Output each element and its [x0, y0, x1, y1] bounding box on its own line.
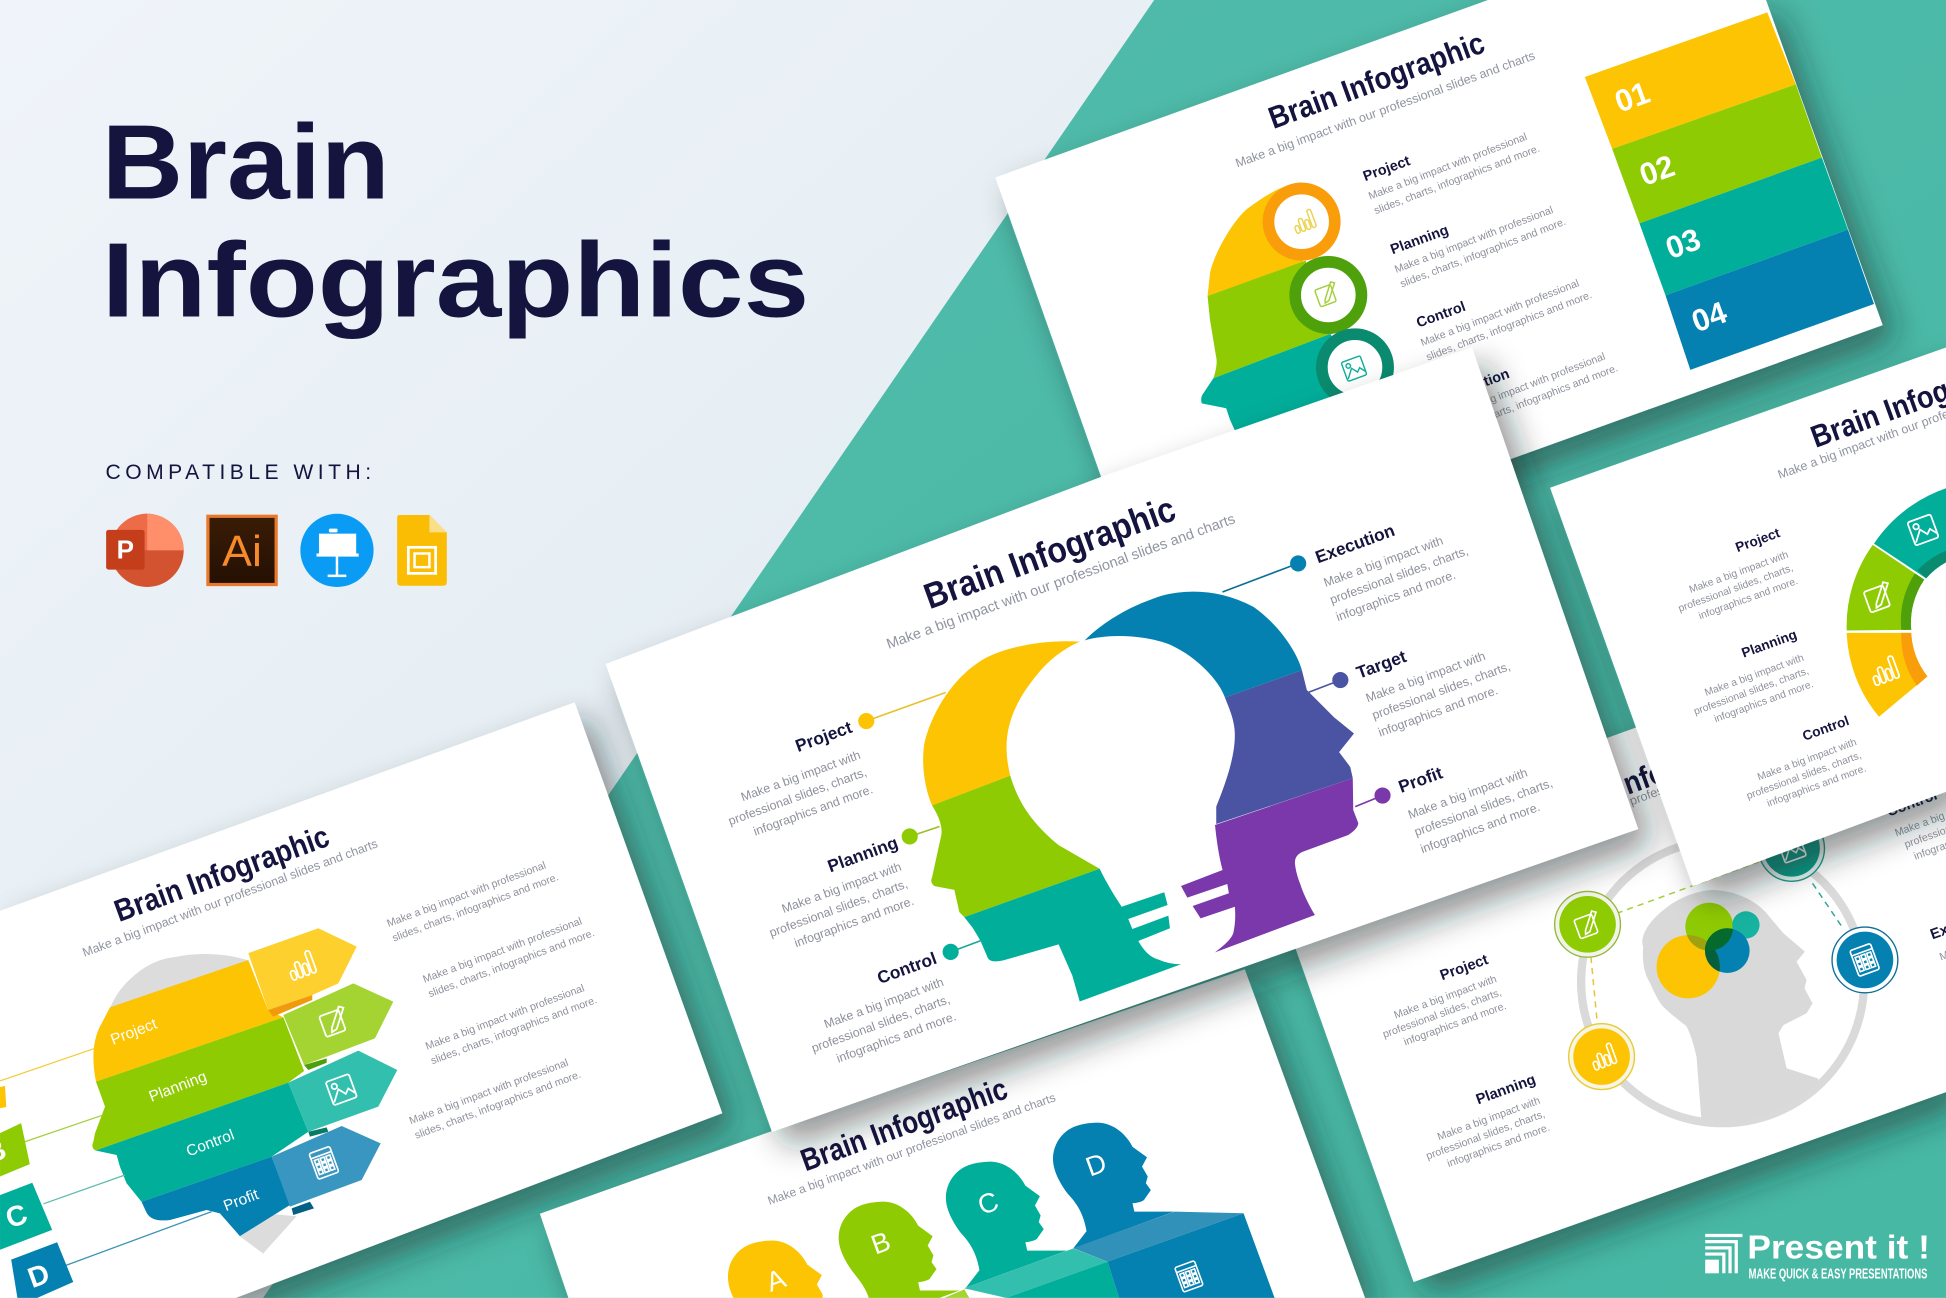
arrow icons — [285, 950, 357, 1179]
connector lines — [866, 563, 1383, 952]
grey ring — [1581, 840, 1864, 1123]
panel: left slide with arrow head — [0, 702, 722, 1298]
text items: Make a big impact with — [1756, 737, 1859, 783]
letter tabs: C — [1, 1198, 32, 1235]
text items: Planning — [1388, 222, 1451, 258]
subtitle: Make a big impact with our professional slides and charts — [766, 1090, 1057, 1208]
text item: Target: infographics and more. — [1376, 683, 1500, 740]
text item: Execution: infographics and more. — [1334, 568, 1458, 624]
ring segment: green — [1847, 545, 1924, 630]
text item: Control: professional slides, charts, — [810, 992, 952, 1055]
heading: Brain Infographics: Brain — [102, 105, 390, 222]
title: Brain Infographic — [918, 488, 1181, 617]
text item: Project: infographics and more. — [751, 782, 875, 839]
text: compatible with: COMPATIBLE WITH: — [106, 461, 371, 484]
icon: PowerPoint: P — [117, 534, 134, 564]
head C — [946, 1162, 1067, 1287]
title: Brain Infographic — [796, 1071, 1012, 1178]
text item: Target: professional slides, charts, — [1370, 659, 1512, 722]
text items — [1361, 128, 1620, 437]
text items — [1672, 525, 1868, 815]
text items: Make a big impact with — [1436, 1095, 1542, 1143]
heading: Brain Infographics — [102, 105, 809, 339]
right head: purple — [1181, 778, 1358, 952]
number bands: 04 — [1687, 294, 1732, 339]
number bands: 02 — [1635, 148, 1679, 193]
letter tabs: D — [24, 1258, 54, 1295]
description blocks: slides, charts, infographics and more. — [391, 871, 560, 944]
grey head — [1642, 890, 1818, 1122]
text items: slides, charts, infographics and more. — [1451, 362, 1620, 437]
dots — [858, 555, 1391, 960]
text item: Control: infographics and more. — [835, 1009, 958, 1066]
text items: slides, charts, infographics and more. — [1372, 143, 1542, 217]
panel: main centre slide with two heads — [606, 347, 1638, 1132]
subtitle: Make a big impact with our professional slides and charts — [885, 511, 1238, 653]
node: image — [1759, 815, 1824, 881]
text item: Project: professional slides, charts, — [726, 765, 869, 828]
text items: Project — [1438, 952, 1491, 984]
text item: Project — [720, 717, 875, 845]
number bands: 01 — [1610, 75, 1654, 120]
text items: Make a big impact with — [1703, 653, 1806, 699]
band labels: Planning — [147, 1068, 209, 1106]
text item: Target — [1353, 642, 1519, 740]
description blocks: Make a big impact with professional — [385, 860, 548, 930]
text items: Control — [1414, 299, 1468, 331]
text item: Target: Target — [1353, 646, 1409, 683]
text items: Project — [1733, 525, 1782, 555]
icon: Illustrator — [208, 516, 276, 585]
number bands — [1585, 12, 1874, 370]
dashed connectors — [1591, 861, 1843, 1026]
icon: Illustrator: Ai — [222, 528, 262, 576]
subtitle: Make a big impact with our professional slides and charts — [1234, 49, 1537, 170]
title: Brain Infographic — [1264, 25, 1489, 136]
box: teal — [964, 1248, 1119, 1298]
head A: A — [762, 1262, 790, 1298]
logo: Present it!: Present it ! — [1747, 1229, 1930, 1266]
overlapping colour circles — [1657, 903, 1760, 998]
panel: top slide with stacked head — [995, 0, 1883, 592]
title: Brain Infographic — [110, 819, 334, 929]
ring segment: teal — [1874, 484, 1946, 578]
text items: infographics and more. — [1697, 576, 1800, 622]
text items — [1376, 783, 1946, 1176]
left head: teal — [964, 869, 1181, 1002]
text items: slides, charts, infographics and more. — [1425, 289, 1594, 364]
text items: Control — [1885, 787, 1940, 820]
panel: bottom centre slide with four heads — [540, 969, 1365, 1298]
box: blue — [1073, 1212, 1275, 1298]
text item: Control: Control — [874, 948, 939, 988]
text items: Planning — [1740, 627, 1799, 661]
text item: Control — [803, 948, 958, 1072]
band labels: Project — [108, 1015, 160, 1049]
subtitle: Make a big impact with our professional slides and charts — [81, 837, 380, 960]
text item: Profit: professional slides, charts, — [1412, 776, 1554, 839]
head B — [839, 1202, 969, 1298]
arrow: project — [248, 928, 357, 1017]
text item: Project: Make a big impact with — [739, 748, 862, 804]
head A — [728, 1241, 823, 1298]
node: bars — [1569, 1024, 1634, 1090]
grey head base — [110, 954, 297, 1253]
band: planning — [92, 1017, 304, 1150]
icon: Keynote — [300, 514, 374, 587]
text item: Project: Project — [793, 717, 855, 756]
ring segment: yellow — [1847, 633, 1927, 717]
text items: professional slides, charts, — [1693, 666, 1810, 718]
connector lines — [0, 1048, 212, 1266]
text items: Make a big impact with professional — [1419, 277, 1581, 349]
head D: D — [1081, 1147, 1111, 1182]
text items: professional slides, charts, — [1677, 563, 1795, 615]
text items: professional slides, charts, — [1745, 750, 1863, 802]
band: project — [93, 960, 283, 1082]
head D — [1053, 1123, 1174, 1248]
arrow: profit — [272, 1126, 381, 1215]
arrow: control — [288, 1051, 397, 1137]
text item: Target: Make a big impact with — [1364, 649, 1487, 705]
head B: B — [867, 1225, 895, 1260]
subtitle: Make a big impact with our professional slides and charts — [1484, 739, 1788, 860]
text items: professional slides, charts, — [1381, 987, 1503, 1041]
icon: logo mark — [1705, 1235, 1742, 1273]
description blocks: slides, charts, infographics and more. — [413, 1069, 583, 1142]
text item: Planning: infographics and more. — [792, 894, 916, 950]
node: calculator — [1832, 927, 1898, 993]
description blocks: Make a big impact with professional — [408, 1057, 570, 1127]
text item: Profit: Make a big impact with — [1406, 766, 1530, 822]
text item: Execution — [1313, 520, 1476, 624]
stacked head — [1201, 182, 1388, 447]
text items: infographics and more. — [1402, 1000, 1508, 1048]
icon: Google Slides — [397, 515, 447, 586]
text items: Make a big impact with professional — [1445, 351, 1607, 422]
heading: Brain Infographics: Infographics — [102, 222, 809, 339]
text items: Make a big impact with — [1688, 550, 1790, 596]
text items: Execution — [1442, 366, 1512, 405]
text item: Execution: professional slides, charts, — [1328, 544, 1470, 607]
text items: infographics and more. — [1766, 763, 1868, 810]
left head: green — [931, 776, 1100, 917]
panel: right slide with ring segments — [1550, 344, 1946, 886]
text items: Project — [1361, 153, 1413, 185]
node: edit — [1555, 891, 1620, 957]
band labels: Control — [184, 1127, 237, 1160]
text items: Make a big impact with professional — [1393, 204, 1555, 276]
band: control — [96, 1083, 308, 1202]
arrow: planning — [283, 983, 393, 1070]
text items: Make a big impact with professional — [1367, 131, 1529, 203]
title: Brain Infographic — [1538, 720, 1763, 831]
description blocks: Make a big impact with professional — [424, 982, 586, 1053]
logo: Present it! — [1705, 1229, 1930, 1282]
left head: yellow — [923, 641, 1080, 805]
icon: PowerPoint — [106, 514, 184, 587]
text item: Planning: Make a big impact with — [780, 860, 903, 916]
description blocks: slides, charts, infographics and more. — [429, 994, 599, 1067]
text items: Control — [1800, 713, 1851, 744]
text items: Planning — [1474, 1072, 1538, 1108]
band labels: Profit — [221, 1186, 262, 1215]
number bands: 03 — [1661, 221, 1705, 266]
right head: blue — [1085, 592, 1302, 697]
description blocks: slides, charts, infographics and more. — [427, 927, 596, 1000]
text item: Planning — [761, 832, 916, 957]
text items: professional slides, charts, — [1425, 1108, 1547, 1162]
text item: Profit — [1396, 759, 1561, 856]
text item: Execution: Execution — [1313, 520, 1397, 567]
text items: slides, charts, infographics and more. — [1399, 216, 1568, 290]
band labels — [108, 1015, 262, 1215]
text item: Profit: infographics and more. — [1419, 800, 1542, 856]
text items: infographics and more. — [1446, 1122, 1552, 1170]
text item: Execution: Make a big impact with — [1322, 533, 1445, 590]
text items: infographics and more. — [1713, 679, 1815, 725]
text item: Control: Make a big impact with — [822, 975, 946, 1031]
right head: indigo — [1216, 670, 1354, 824]
text items: Make a big impact with — [1392, 973, 1498, 1022]
text item: Planning: professional slides, charts, — [767, 877, 910, 940]
band: profit — [142, 1157, 290, 1236]
head C: C — [973, 1185, 1003, 1221]
text item: Profit: Profit — [1396, 762, 1445, 797]
letter tabs — [0, 1086, 73, 1298]
description blocks — [385, 857, 599, 1142]
description blocks: Make a big impact with professional — [421, 915, 584, 986]
text item: Planning: Planning — [825, 832, 901, 876]
panel: lower right slide with circle diagram — [1290, 728, 1946, 1298]
